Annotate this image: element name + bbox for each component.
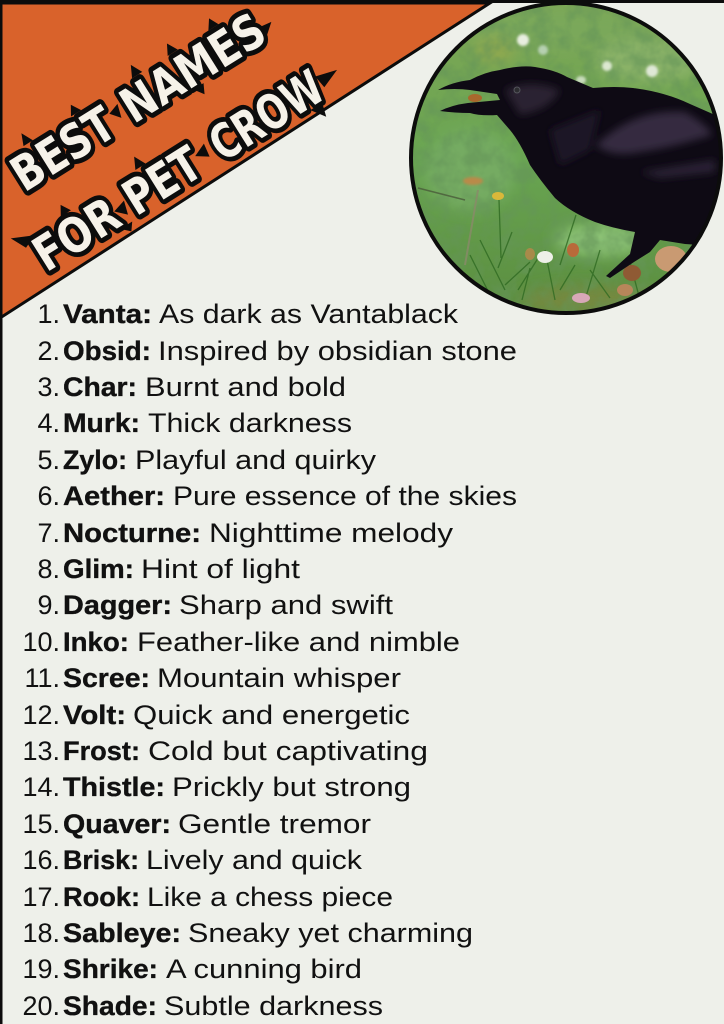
item 7: 7. [37,518,60,548]
item 2 [37,336,517,366]
item 20: 20. [22,991,60,1021]
item 9: Dagger: [63,590,172,620]
item 10 [22,627,460,657]
item 4: Thick darkness [148,408,352,438]
item 7: Nighttime melody [209,518,454,548]
item 1: As dark as Vantablack [159,299,459,329]
crow feather sheen [505,84,715,178]
item 3: 3. [37,372,60,402]
eye [514,87,520,93]
item 19: 19. [22,954,60,984]
grass texture [416,6,706,311]
item 2: Obsid: [63,336,151,366]
item 15: Quaver: [63,809,171,839]
item 15: Gentle tremor [178,809,371,839]
title line: best names [0,0,285,203]
item 20: Subtle darkness [164,991,383,1021]
item 19: A cunning bird [166,954,362,984]
item 5: Playful and quirky [135,445,377,475]
item 9: 9. [37,590,60,620]
item 12: Volt: [63,700,126,730]
item 17: 17. [22,882,60,912]
item 5: Zylo: [63,445,127,475]
item 8 [37,554,301,584]
item 17: Like a chess piece [147,882,393,912]
item 16: Brisk: [63,845,139,875]
item 11: Scree: [63,663,150,693]
names list [22,299,517,1021]
title line: for pet crow: FOR [23,187,131,283]
item 6 [37,481,517,511]
flowers and leaves [463,34,687,303]
item 20 [22,991,383,1021]
item 18: 18. [22,918,60,948]
orange corner banner [0,3,490,318]
crow photo in circle [405,0,724,320]
item 16 [22,845,363,875]
item 17 [22,882,393,912]
item 1 [37,299,459,329]
item 5 [37,445,377,475]
title line: for pet crow [9,41,355,293]
item 3: Char: [63,372,137,402]
item 8: 8. [37,554,60,584]
item 6: 6. [37,481,60,511]
item 13: Frost: [63,736,140,766]
item 11: 11. [24,663,60,693]
photo ring [411,3,721,313]
grass background [413,5,712,311]
item 19 [22,954,362,984]
item 1: Vanta: [63,299,152,329]
item 3: Burnt and bold [145,372,346,402]
item 17: Rook: [63,882,140,912]
item 4: 4. [37,408,60,438]
item 5: 5. [37,445,60,475]
item 8: Hint of light [141,554,301,584]
item 11 [24,663,401,693]
item 6: Aether: [63,481,165,511]
item 6: Pure essence of the skies [173,481,517,511]
title line: for pet crow: CROW [199,60,334,173]
item 10: Inko: [63,627,129,657]
item 14: Prickly but strong [172,772,411,802]
item 10: 10. [22,627,60,657]
title line: best names: BEST [1,96,126,203]
item 13: Cold but captivating [148,736,428,766]
item 13 [22,736,428,766]
item 3 [37,372,346,402]
title line: for pet crow: PET [113,136,212,227]
grass blades [418,188,640,300]
title [0,0,355,293]
item 10: Feather-like and nimble [137,627,460,657]
crow body [438,66,722,278]
item 14 [22,772,411,802]
item 18 [22,918,473,948]
item 12: 12. [22,700,60,730]
item 16: 16. [22,845,60,875]
item 4: Murk: [63,408,140,438]
item 20: Shade: [63,991,157,1021]
item 1: 1. [37,299,60,329]
item 12: Quick and energetic [133,700,410,730]
item 15: 15. [22,809,60,839]
item 18: Sneaky yet charming [188,918,473,948]
item 13: 13. [22,736,60,766]
item 14: Thistle: [63,772,165,802]
item 18: Sableye: [63,918,181,948]
item 7: Nocturne: [63,518,201,548]
item 11: Mountain whisper [157,663,401,693]
item 2: 2. [37,336,60,366]
item 8: Glim: [63,554,134,584]
item 9 [37,590,394,620]
item 4 [37,408,352,438]
item 12 [22,700,410,730]
item 7 [37,518,454,548]
item 2: Inspired by obsidian stone [158,336,517,366]
food in beak [468,94,482,102]
item 15 [22,809,371,839]
item 9: Sharp and swift [179,590,394,620]
item 14: 14. [22,772,60,802]
item 19: Shrike: [63,954,158,984]
item 16: Lively and quick [146,845,363,875]
